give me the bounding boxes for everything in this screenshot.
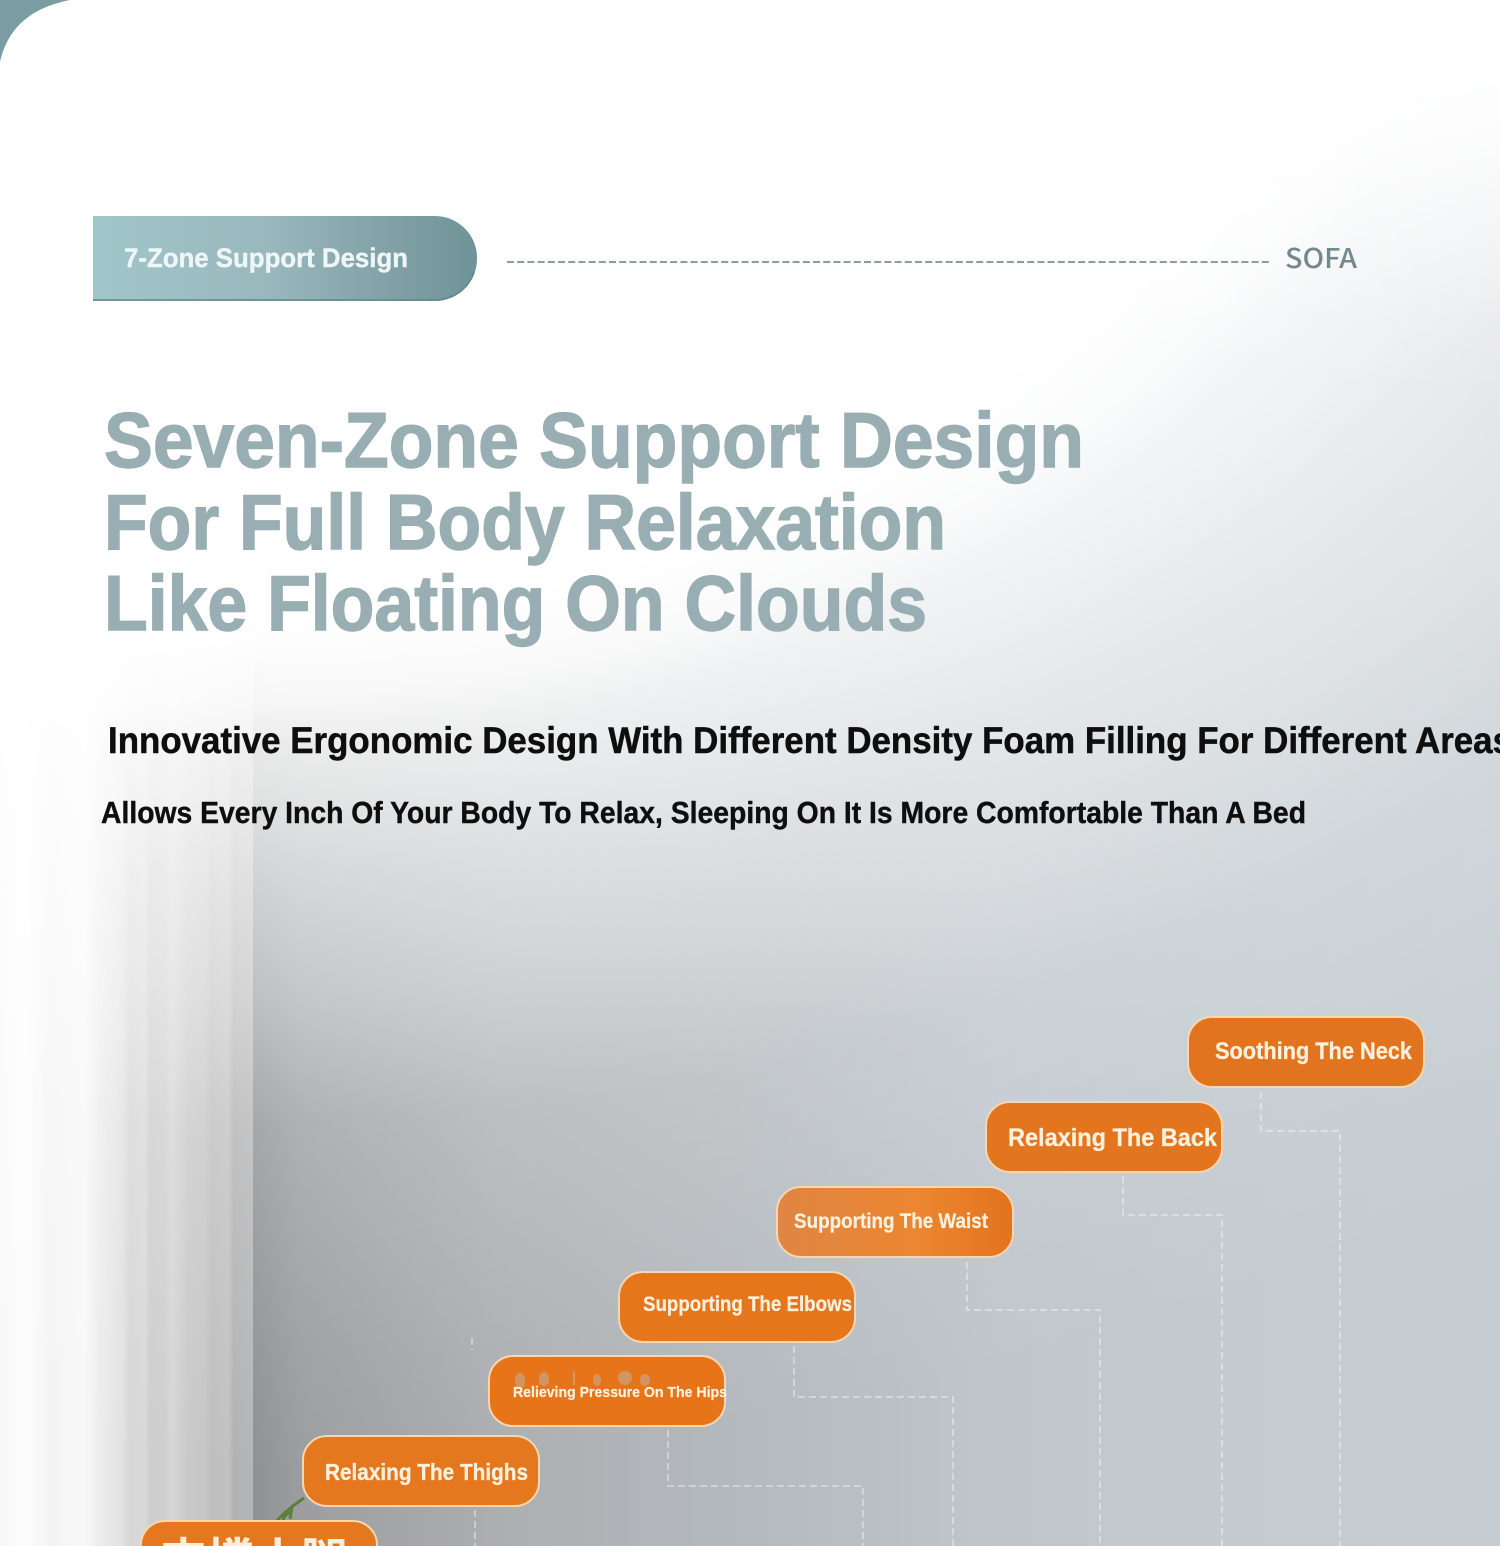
label: relaxing the back <box>986 1102 1222 1172</box>
label: supporting the elbows: Supporting The Elbows <box>643 1293 852 1316</box>
dashed header rule <box>507 261 1272 263</box>
label: relieving pressure on the hips: Relieving Pressure On The Hips <box>513 1384 727 1401</box>
product label: SOFA <box>1285 237 1357 276</box>
main title: Seven-Zone Support Design <box>104 396 1084 484</box>
icon: plant leaf <box>276 1498 304 1522</box>
description line two: Allows Every Inch Of Your Body To Relax, Sleeping On It Is More Comfortable Than A Bed <box>101 795 1306 830</box>
corner accent <box>0 0 70 62</box>
label: relaxing the thighs: Relaxing The Thighs <box>325 1459 528 1485</box>
label: supporting the waist <box>777 1187 1013 1257</box>
main title <box>104 396 1084 647</box>
main title: Like Floating On Clouds <box>104 559 927 647</box>
label: soothing the neck <box>1188 1017 1424 1087</box>
label: supporting the waist: Supporting The Waist <box>794 1210 988 1233</box>
label: relaxing the back: Relaxing The Back <box>1008 1124 1217 1152</box>
main title: For Full Body Relaxation <box>104 478 946 566</box>
label: supporting the calves <box>141 1521 377 1546</box>
header tab <box>93 216 477 301</box>
label: relieving pressure on the hips <box>489 1356 727 1426</box>
header tab: 7-Zone Support Design <box>124 243 408 273</box>
label: soothing the neck: Soothing The Neck <box>1215 1038 1413 1065</box>
label: supporting the elbows <box>619 1272 855 1342</box>
label: relaxing the thighs <box>303 1436 539 1506</box>
dashed connectors <box>472 1092 1340 1546</box>
